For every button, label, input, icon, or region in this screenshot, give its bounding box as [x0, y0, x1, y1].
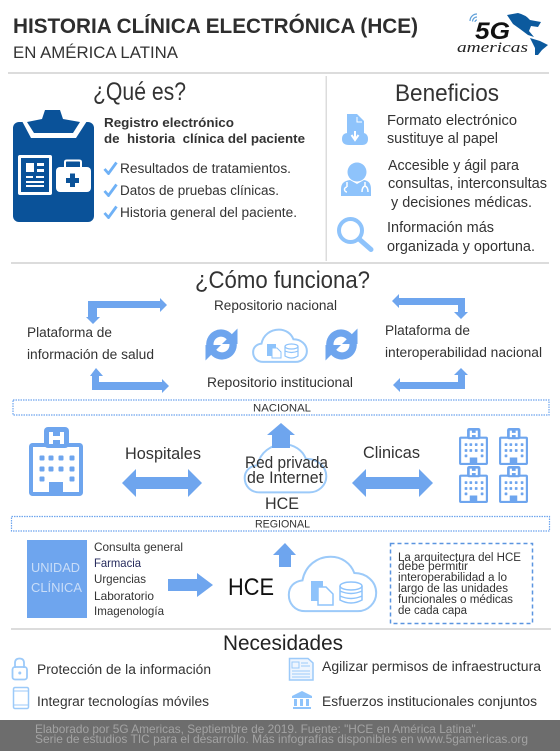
callout: arquitectura: debe permitir	[398, 561, 468, 573]
icon: magnifier	[339, 219, 371, 250]
label: red privada de internet	[245, 454, 329, 487]
callout: arquitectura: de cada capa	[398, 605, 468, 617]
text: formato	[387, 113, 517, 147]
title	[13, 14, 418, 62]
label: repositorio institucional: Repositorio institucional	[207, 375, 353, 390]
band: regional: REGIONAL	[255, 518, 310, 530]
list: services: Consulta general	[94, 540, 183, 554]
arrow: clinicas	[352, 469, 433, 497]
icon: cloud with documents	[253, 330, 307, 362]
label: plataforma de interoperabilidad: Plataforma de	[385, 323, 470, 338]
label: repositorio nacional: Repositorio nacional	[214, 298, 337, 313]
text: proteccion: Protección de la información	[37, 662, 211, 677]
arrow: hospitales	[122, 469, 202, 497]
arrow: top right	[392, 294, 468, 319]
text: informacion: Información más	[387, 220, 494, 236]
text: esfuerzos: Esfuerzos institucionales conjuntos	[322, 694, 537, 709]
panel: como funciona	[13, 267, 549, 415]
callout: arquitectura: largo de las unidades	[398, 583, 508, 595]
list: services	[94, 540, 183, 618]
icon: four clinics	[460, 428, 527, 503]
icon: cloud with documents large	[289, 557, 376, 611]
label: red privada de internet: Red privada	[245, 454, 329, 472]
list: services: Imagenología	[94, 604, 164, 618]
checklist	[104, 161, 297, 220]
section dividers	[8, 72, 551, 630]
label: red privada de internet: de Internet	[247, 469, 323, 487]
panel: que es	[13, 78, 305, 222]
icon: newspaper	[290, 658, 313, 680]
icon: lock	[12, 658, 27, 680]
box: unidad clinica	[27, 540, 87, 618]
label: clinicas: Clinicas	[363, 444, 420, 462]
label: plataforma de informacion de salud: Plataforma de	[27, 325, 112, 340]
label: plataforma de informacion de salud: información de salud	[27, 347, 154, 362]
text: formato: sustituye al papel	[387, 131, 498, 147]
logo: 5G Americas: 5G	[475, 18, 510, 45]
panel: unidad clinica	[27, 540, 532, 624]
arrow: bottom left	[90, 368, 169, 393]
icon: clipboard	[13, 110, 94, 222]
text: formato: Formato electrónico	[387, 113, 517, 129]
list: services: Urgencias	[94, 572, 146, 586]
text: accesible	[388, 158, 547, 211]
band: nacional: NACIONAL	[253, 402, 311, 414]
heading: que es: ¿Qué es?	[93, 78, 186, 106]
icon: institution	[292, 691, 312, 709]
callout: arquitectura: La arquitectura del HCE	[398, 552, 521, 564]
arrow: up	[273, 543, 296, 567]
panel: beneficios	[339, 80, 547, 255]
text: definition: de historia clínica del paciente	[104, 131, 305, 146]
callout: arquitectura: interoperabilidad a lo	[398, 572, 507, 584]
arrow: top left	[86, 298, 167, 324]
text: moviles: Integrar tecnologías móviles	[37, 694, 209, 709]
icon: document cloud	[342, 114, 368, 145]
text: accesible: consultas, interconsultas	[388, 176, 547, 192]
text: informacion: organizada y oportuna.	[387, 239, 535, 255]
footer: Elaborado por 5G Americas, Septiembre de 2019. Fuente: "HCE en América Latina".	[35, 722, 479, 736]
footer	[0, 720, 560, 751]
label: hospitales: Hospitales	[125, 445, 201, 463]
label: plataforma de interoperabilidad: interoperabilidad nacional	[385, 345, 542, 360]
box: unidad clinica: CLÍNICA	[31, 580, 82, 595]
logo: 5G Americas: americas	[457, 40, 528, 56]
heading: como funciona: ¿Cómo funciona?	[195, 267, 370, 294]
icon: phone	[14, 688, 28, 708]
icon: doctor	[341, 162, 371, 196]
heading: beneficios: Beneficios	[395, 80, 499, 107]
checklist: Resultados de tratamientos.	[120, 161, 291, 176]
icon: sync left	[205, 328, 238, 361]
footer: Serie de estudios TIC para el desarrollo. Más infografías disponibles en www.5gamericas.org	[35, 732, 528, 746]
heading: necesidades: Necesidades	[223, 632, 343, 655]
text: definition	[104, 115, 305, 146]
title: HISTORIA CLÍNICA ELECTRÓNICA (HCE)	[13, 14, 418, 38]
text: accesible: y decisiones médicas.	[391, 195, 532, 211]
text: definition: Registro electrónico	[104, 115, 234, 130]
checklist: Historia general del paciente.	[120, 205, 297, 220]
list: services: Farmacia	[94, 556, 141, 570]
checklist: Datos de pruebas clínicas.	[120, 183, 279, 198]
label: hce: HCE	[265, 494, 299, 513]
icon: sync right	[325, 328, 358, 361]
logo: 5G Americas	[457, 13, 548, 56]
label: hce large: HCE	[228, 574, 274, 601]
band: nacional	[13, 400, 549, 415]
panel: network	[12, 423, 550, 531]
text: accesible: Accesible y ágil para	[388, 158, 520, 174]
icon: private cloud	[245, 423, 326, 492]
box: unidad clinica: UNIDAD	[31, 560, 80, 575]
band: regional	[12, 516, 550, 531]
callout: arquitectura: funcionales o médicas	[398, 594, 513, 606]
text: informacion	[387, 220, 535, 255]
title: EN AMÉRICA LATINA	[13, 43, 179, 62]
text: infraestructura: Agilizar permisos de infraestructura	[322, 659, 541, 674]
label: plataforma de interoperabilidad	[385, 323, 542, 360]
panel: necesidades	[12, 632, 541, 709]
list: services: Laboratorio	[94, 589, 154, 603]
icon: hospital	[31, 427, 81, 496]
arrow: bottom right	[393, 368, 468, 392]
arrow: to hce	[168, 573, 213, 597]
label: plataforma de informacion de salud	[27, 325, 154, 362]
callout: arquitectura	[390, 544, 532, 624]
